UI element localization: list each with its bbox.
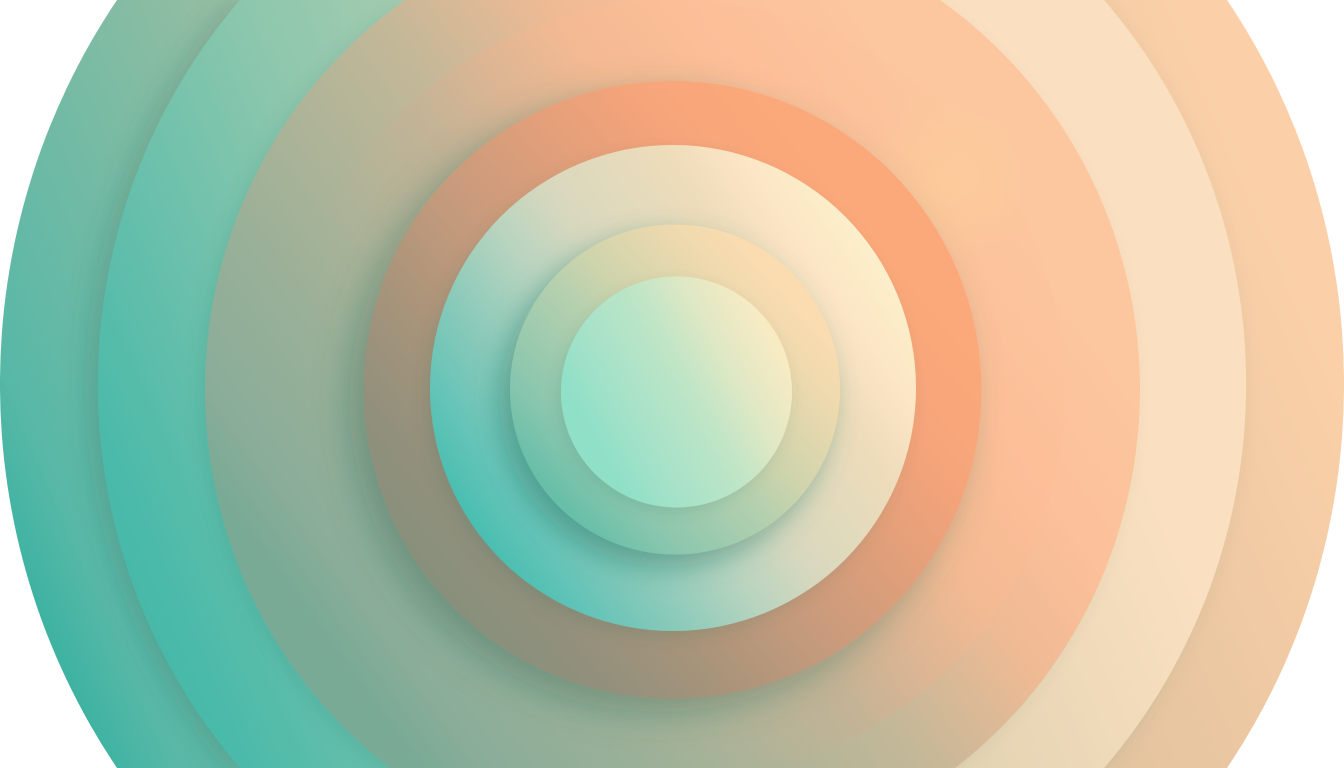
circle 3b: faint inner ring (285, 0, 1065, 768)
circle 6: inner ring (510, 224, 840, 554)
circle 7: centre disc (561, 276, 792, 508)
circle 3: third ring (205, 0, 1140, 768)
soft glow (860, 90, 1040, 270)
circle 5: pale ring (430, 145, 916, 631)
circle 4: orange ring (364, 81, 982, 699)
